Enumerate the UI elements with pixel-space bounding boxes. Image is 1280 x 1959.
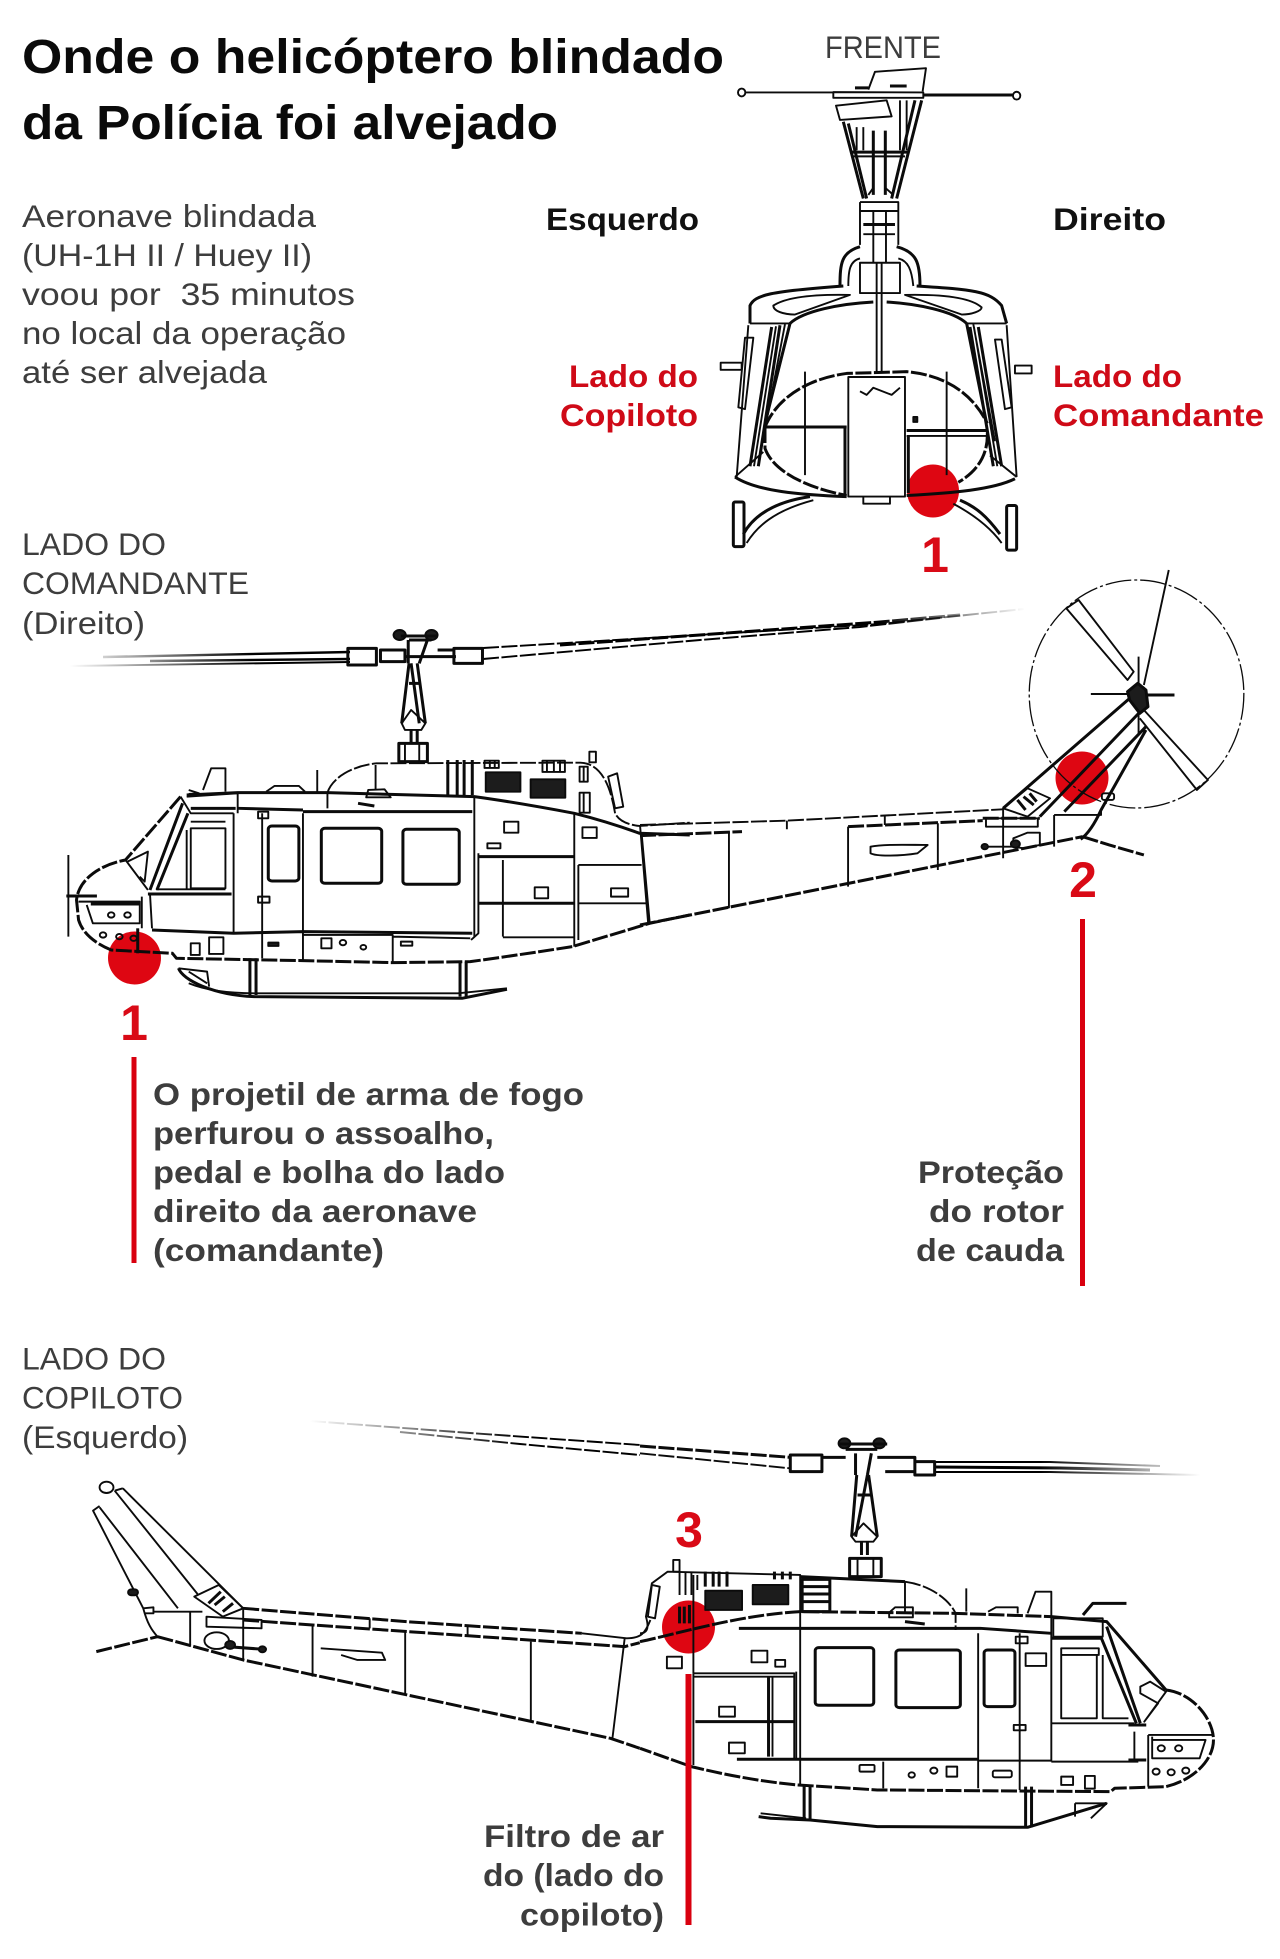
leader line 3 <box>686 1674 692 1925</box>
label: frente: FRENTE <box>825 29 941 65</box>
main rotor blades <box>310 1421 1200 1475</box>
leader line 2 <box>1080 919 1085 1286</box>
helicopter: left side view <box>93 1421 1213 1827</box>
label: lado do comandante (direito): COMANDANTE <box>22 565 249 601</box>
callout 3 text: Filtro de ar <box>484 1818 664 1854</box>
label: lado do copiloto: Copiloto <box>560 397 698 433</box>
number 1: front view: 1 <box>921 527 949 583</box>
label: lado do comandante <box>1053 358 1264 433</box>
callout 1 text: direito da aeronave <box>153 1193 477 1229</box>
callout 3 text: copiloto) <box>520 1896 664 1932</box>
label: lado do comandante: Lado do <box>1053 358 1182 394</box>
fuselage <box>640 1438 1213 1827</box>
label: lado do copiloto (esquerdo): (Esquerdo) <box>22 1419 188 1455</box>
label: lado do comandante: Comandante <box>1053 397 1264 433</box>
title: Onde o helicóptero blindado <box>22 31 724 84</box>
label: lado do comandante (direito) <box>22 526 249 641</box>
intro text: no local da operação <box>22 315 346 351</box>
intro text: (UH-1H II / Huey II) <box>22 237 312 273</box>
impact marker: tail <box>1056 752 1108 804</box>
leader line 1 <box>132 1057 136 1263</box>
impact marker: nose <box>108 932 161 984</box>
helicopter: front view <box>721 68 1032 550</box>
label: esquerdo: Esquerdo <box>546 201 699 237</box>
helicopter: right side view <box>66 570 1244 998</box>
callout 1 text <box>153 1076 584 1268</box>
impact marker: front view <box>907 464 959 518</box>
callout 2 text: Proteção <box>918 1154 1064 1190</box>
label: lado do copiloto (esquerdo) <box>22 1340 188 1455</box>
label: lado do copiloto (esquerdo): COPILOTO <box>22 1380 183 1416</box>
callout 1 text: perfurou o assoalho, <box>153 1115 494 1151</box>
tail boom and tail rotor <box>640 570 1244 925</box>
label: lado do copiloto (esquerdo): LADO DO <box>22 1340 166 1376</box>
callout 3 text <box>483 1818 664 1932</box>
callout 2 text: de cauda <box>916 1232 1065 1268</box>
callout 3 text: do (lado do <box>483 1857 664 1893</box>
title <box>22 31 724 150</box>
number 3: 3 <box>675 1502 703 1558</box>
callout 1 text: (comandante) <box>153 1232 384 1268</box>
intro text: voou por 35 minutos <box>22 276 355 312</box>
fuselage <box>66 630 690 998</box>
callout 2 text: do rotor <box>929 1193 1064 1229</box>
intro text: até ser alvejada <box>22 354 268 390</box>
label: direito: Direito <box>1053 201 1166 237</box>
intro text: Aeronave blindada <box>22 198 317 234</box>
callout 1 text: pedal e bolha do lado <box>153 1154 505 1190</box>
intro text <box>22 198 355 390</box>
impact marker: air filter <box>662 1600 715 1654</box>
callout 1 text: O projetil de arma de fogo <box>153 1076 584 1112</box>
title: da Polícia foi alvejado <box>22 97 558 150</box>
callout 2 text <box>916 1154 1065 1268</box>
number 1: side view: 1 <box>120 995 148 1051</box>
number 2: 2 <box>1069 852 1097 908</box>
label: lado do comandante (direito): (Direito) <box>22 605 145 641</box>
label: lado do copiloto: Lado do <box>569 358 698 394</box>
tail boom and fin <box>93 1482 650 1748</box>
label: lado do copiloto <box>560 358 698 433</box>
label: lado do comandante (direito): LADO DO <box>22 526 166 562</box>
main rotor blades <box>70 609 1024 666</box>
